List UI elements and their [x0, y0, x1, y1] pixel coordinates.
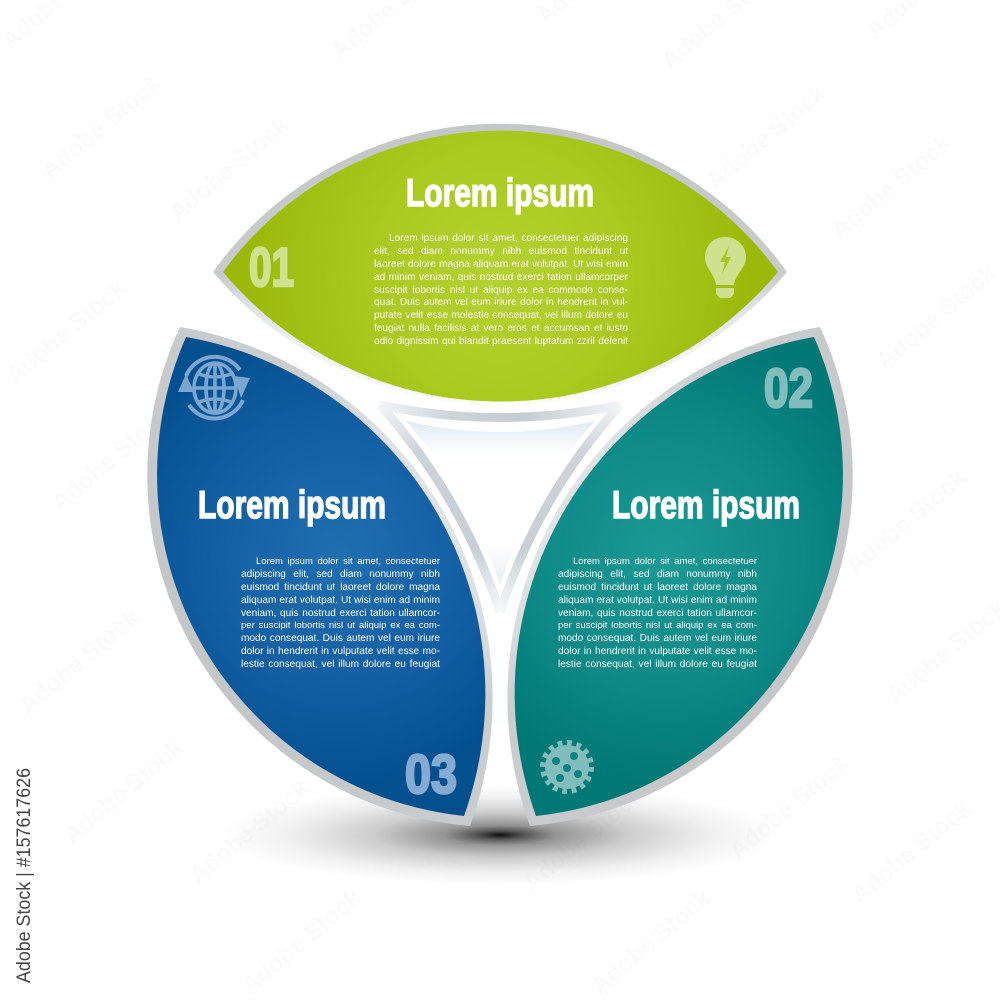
- teal body text: adipiscing elit, sed diam nonummy nibh: [558, 569, 757, 580]
- blue body text: veniam, quis nostrud exerci tation ullamcor-: [241, 608, 440, 618]
- number 02: 02: [764, 357, 813, 419]
- watermark: Adobe Stock pattern: Adobe Stock: [725, 749, 855, 865]
- green body text: suscipit lobortis nisl ut aliquip ex ea commodo conse-: [374, 284, 628, 296]
- panel: centre triangle: [374, 400, 626, 622]
- blue body text: per suscipit lobortis nisl ut aliquip ex ea com-: [241, 620, 440, 631]
- watermark: Adobe Stock pattern: Adobe Stock: [59, 734, 189, 850]
- teal body text: per suscipit lobortis nisl ut aliquip ex ea com-: [558, 620, 757, 631]
- icon: globe with arrows: [178, 357, 250, 419]
- teal leaf silver border: [507, 327, 853, 826]
- watermark: Adobe Stock pattern: Adobe Stock: [827, 129, 957, 245]
- icon: gear: [543, 743, 591, 791]
- green body text: elit, sed diam nonummy nibh euismod tincidunt ut: [374, 246, 628, 257]
- green body text: Lorem ipsum dolor sit amet, consectetuer adipiscing: [389, 233, 628, 244]
- teal body text: lestie consequat, vel illum dolore eu feugiat: [558, 659, 757, 670]
- blue body text: modo consequat. Duis autem vel eum iriure: [241, 633, 440, 644]
- watermark: Adobe Stock pattern: Adobe Stock: [47, 401, 177, 517]
- panel: blue leaf 03: [147, 327, 493, 826]
- green leaf silver border: [213, 124, 787, 405]
- watermark: Adobe Stock pattern: Adobe Stock: [872, 259, 1000, 375]
- green body text: [374, 233, 628, 351]
- blue body text: dolor in hendrerit in vulputate velit esse mo-: [241, 646, 440, 657]
- teal body text: veniam, quis nostrud exerci tation ullamcor-: [558, 608, 757, 618]
- watermark: Adobe Stock pattern: Adobe Stock: [702, 79, 832, 195]
- drop shadow under the circle: [220, 785, 780, 885]
- blue body text: Lorem ipsum dolor sit amet, consectetuer: [256, 556, 440, 567]
- teal body text: Lorem ipsum dolor sit amet, consectetuer: [573, 556, 757, 567]
- teal body text: euismod tincidunt ut laoreet dolore magna: [558, 582, 757, 593]
- number 01: 01: [249, 236, 294, 298]
- green body text: quat. Duis autem vel eum iriure dolor in hendrerit in vul-: [374, 297, 628, 308]
- teal body text: dolor in hendrerit in vulputate velit esse mo-: [558, 646, 757, 657]
- stock credit text: Adobe Stock | #157617626: [14, 768, 35, 983]
- blue body text: euismod tincidunt ut laoreet dolore magna: [241, 582, 440, 593]
- green body text: odio dignissim qui blandit praesent luptatum zzril delenit: [374, 336, 628, 347]
- watermark: Adobe Stock pattern: Adobe Stock: [587, 884, 717, 1000]
- blue body text: adipiscing elit, sed diam nonummy nibh: [241, 569, 440, 580]
- green body text: putate velit esse molestie consequat, vel illum dolore eu: [374, 310, 628, 321]
- blue leaf fill: [157, 337, 485, 816]
- green leaf fill: [223, 131, 778, 402]
- teal body text: [558, 556, 757, 674]
- teal body text: aliquam erat volutpat. Ut wisi enim ad minim: [558, 595, 757, 606]
- green heading: Lorem ipsum: [406, 172, 594, 215]
- watermark: Adobe Stock pattern: Adobe Stock: [237, 884, 367, 1000]
- watermark: Adobe Stock pattern: Adobe Stock: [15, 604, 145, 720]
- watermark: Adobe Stock pattern: Adobe Stock: [842, 464, 972, 580]
- number 03: 03: [405, 743, 457, 805]
- watermark: Adobe Stock pattern: Adobe Stock: [37, 69, 167, 185]
- watermark: Adobe Stock pattern: Adobe Stock: [519, 781, 649, 897]
- blue leaf silver border: [147, 327, 493, 826]
- green body text: laoreet dolore magna aliquam erat volutpat. Ut wisi enim: [374, 259, 628, 270]
- blue body text: aliquam erat volutpat. Ut wisi enim ad minim: [241, 595, 440, 606]
- teal leaf fill: [515, 337, 843, 816]
- blue heading: Lorem ipsum: [198, 484, 386, 527]
- watermark: Adobe Stock pattern: Adobe Stock: [185, 774, 315, 890]
- icon: light bulb: [705, 237, 746, 298]
- watermark: Adobe Stock pattern: Adobe Stock: [165, 111, 295, 227]
- blue body text: [241, 556, 440, 674]
- panel: teal leaf 02: [507, 327, 853, 826]
- watermark: Adobe Stock pattern: Adobe Stock: [847, 794, 977, 910]
- green body text: ad minim veniam, quis nostrud exerci tation ullamcorper: [374, 272, 628, 283]
- teal body text: modo consequat. Duis autem vel eum iriure: [558, 633, 757, 644]
- green body text: feugiat nulla facilisis at vero eros et accumsan et iusto: [374, 323, 628, 334]
- watermark: Adobe Stock pattern: Adobe Stock: [2, 274, 132, 390]
- teal heading: Lorem ipsum: [612, 484, 800, 527]
- panel: green leaf 01: [213, 124, 787, 405]
- blue body text: lestie consequat, vel illum dolore eu feugiat: [241, 659, 440, 670]
